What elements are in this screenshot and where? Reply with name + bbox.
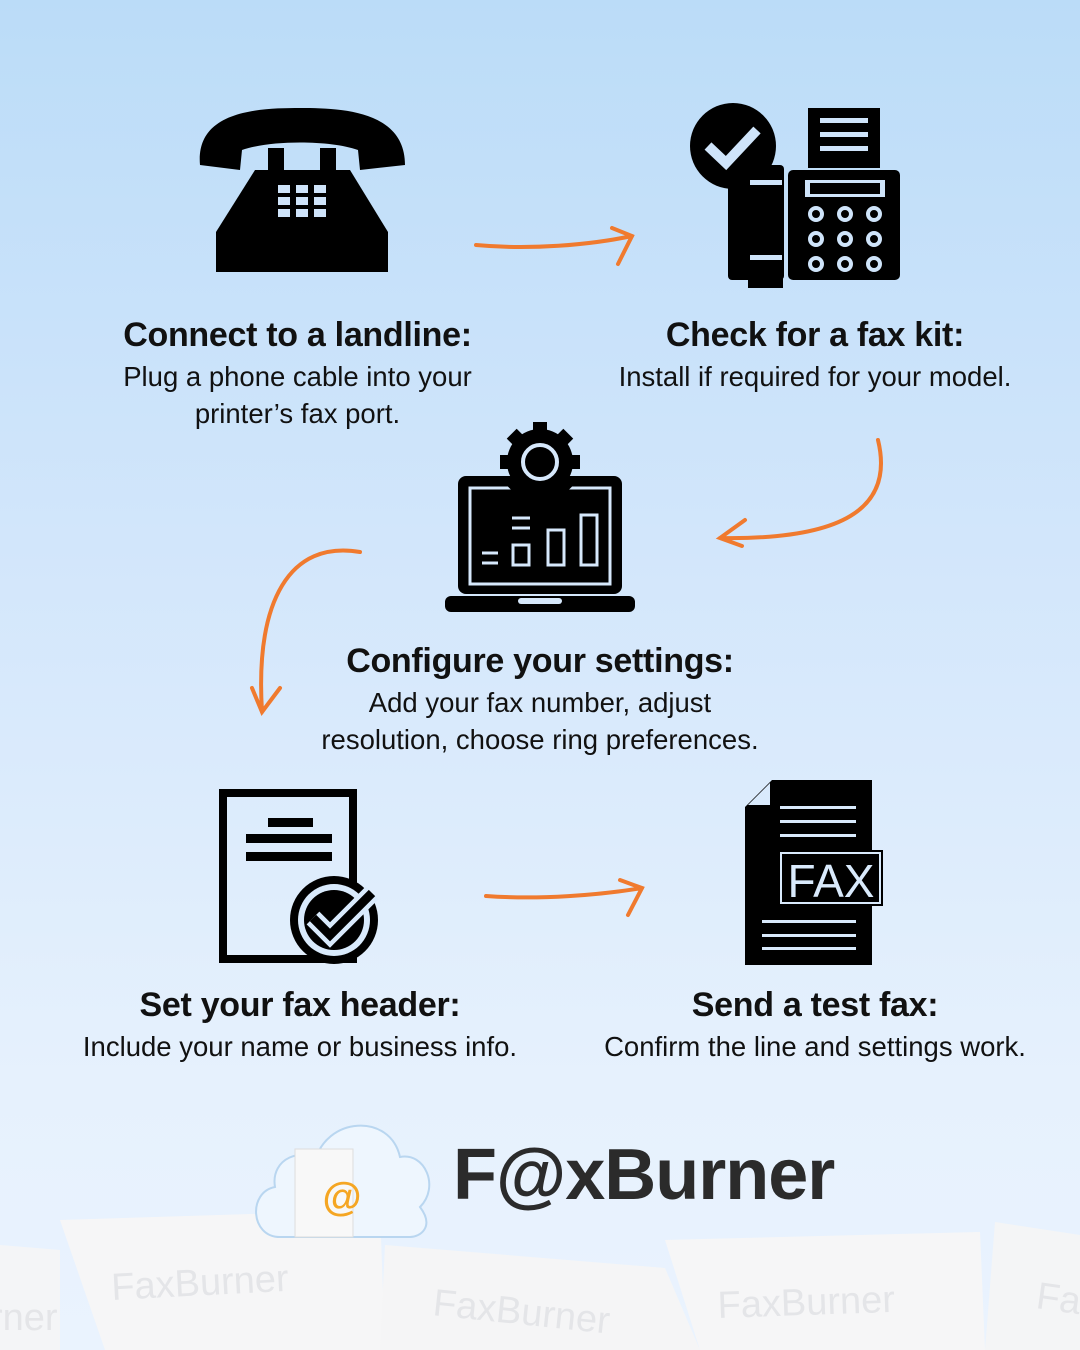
- icon: fax document: FAX: [788, 855, 874, 907]
- title: header: [83, 986, 517, 1062]
- decorative background papers: FaxBurner: [717, 1279, 896, 1327]
- decorative background papers: FaxBurner: [431, 1282, 612, 1343]
- title: connect: [123, 316, 472, 429]
- title: fax kit: Check for a fax kit:: [666, 316, 964, 354]
- title: connect: Plug a phone cable into your printer’s fax port.: [123, 361, 472, 429]
- title: fax kit: Install if required for your model.: [619, 361, 1011, 392]
- title: test fax: [604, 986, 1026, 1062]
- title: header: Set your fax header:: [140, 986, 460, 1024]
- title: connect: Connect to a landline:: [123, 316, 472, 354]
- icon: cloud with @: @: [322, 1175, 362, 1219]
- title: test fax: Send a test fax:: [692, 986, 938, 1024]
- decorative background papers: FaxBurner: [110, 1258, 290, 1309]
- title: fax kit: [619, 316, 1011, 392]
- title: header: Include your name or business info.: [83, 1031, 517, 1062]
- title: configure: Configure your settings:: [346, 642, 734, 680]
- title: configure: [321, 642, 759, 755]
- logo: FaxBurner: [255, 1124, 834, 1238]
- logo: FaxBurner: F@xBurner: [453, 1135, 834, 1215]
- icon: cloud with @: [255, 1124, 430, 1238]
- title: configure: Add your fax number, adjust resolution, choose ring preferences.: [321, 687, 759, 755]
- title: test fax: Confirm the line and settings work.: [604, 1031, 1026, 1062]
